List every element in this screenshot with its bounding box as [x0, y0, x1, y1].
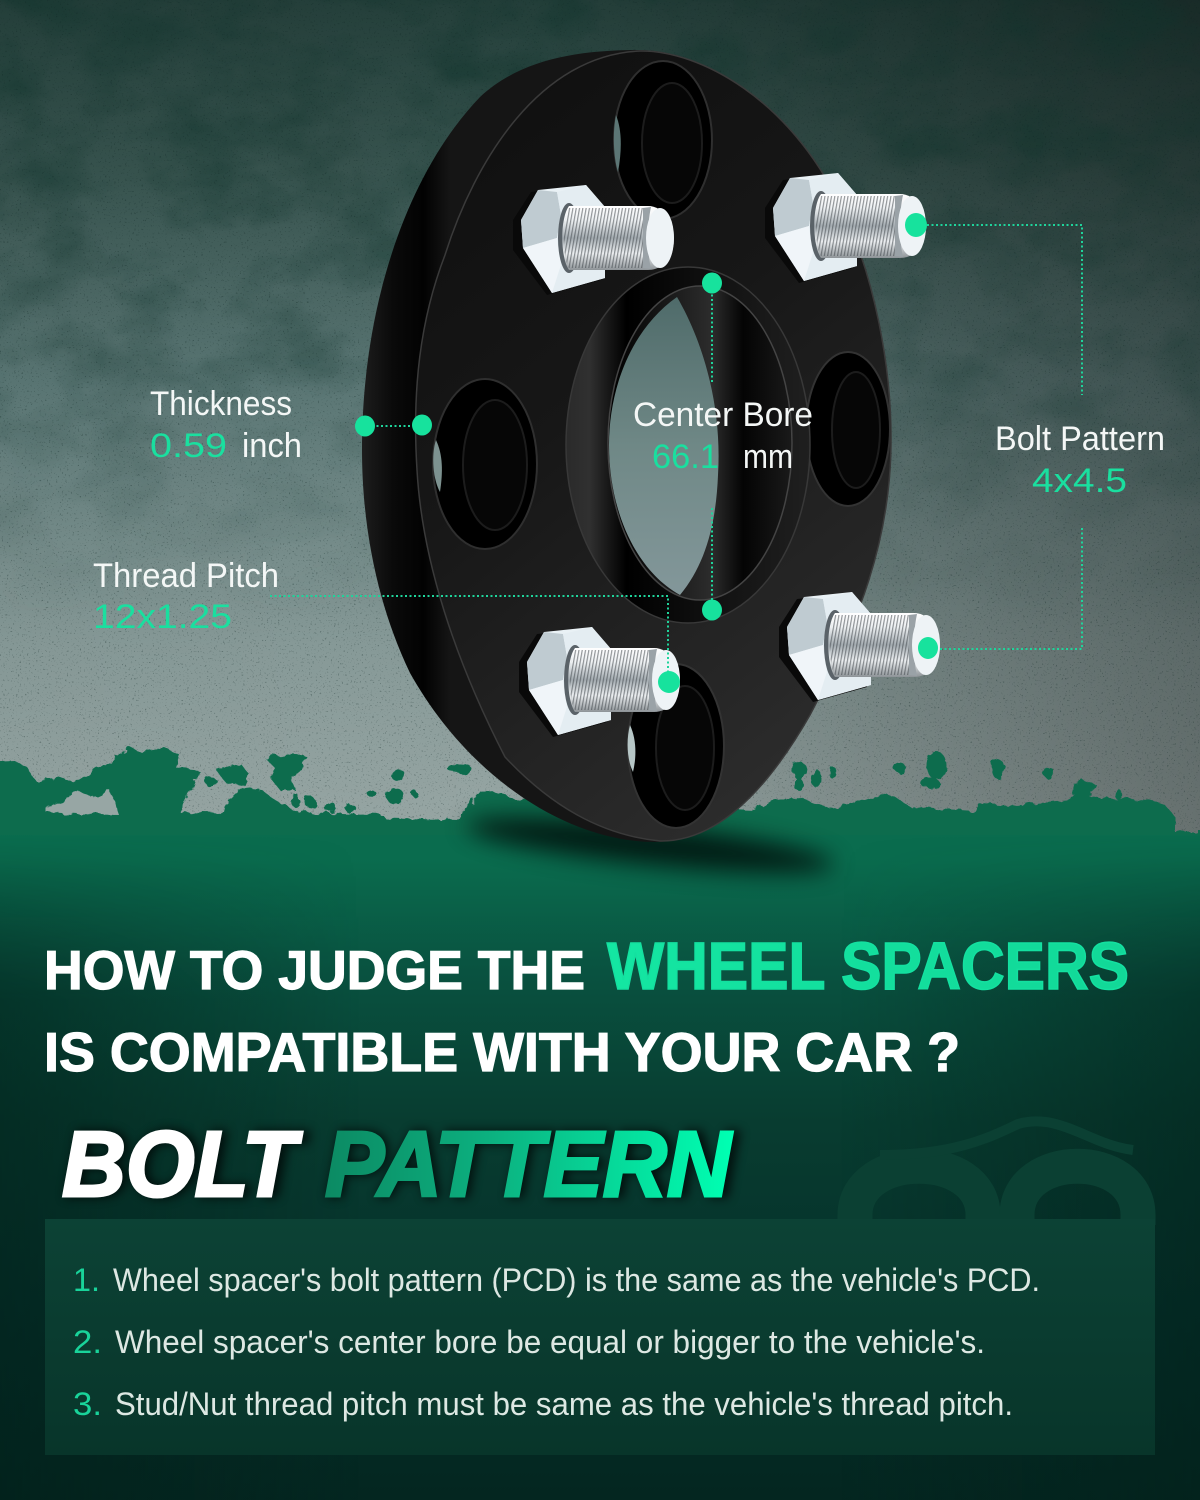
bolt hole: top [614, 61, 712, 219]
splatter blobs [205, 751, 1122, 813]
heading: bolt pattern: BOLT PATTERN [65, 1112, 739, 1216]
label: bolt pattern: Bolt Pattern [995, 420, 1165, 458]
watermark: wheel arches icon [855, 1121, 1138, 1225]
panel: bolt pattern rules [45, 1219, 1155, 1455]
label: center bore [633, 396, 813, 476]
bolt hole: bottom [628, 664, 724, 828]
bolt hole: left [433, 379, 537, 549]
center bore hub [566, 267, 810, 623]
callout: thread pitch leader line [270, 596, 680, 693]
heading: how to judge: WHEEL SPACERS [607, 929, 1129, 1004]
bolt hole: right [806, 352, 890, 506]
label: center bore: 66.1 [652, 438, 719, 476]
callout: bolt pattern leader lines [905, 213, 1082, 659]
stud: top right [765, 173, 926, 283]
background: green paint floor with splatter edge [0, 746, 1200, 1219]
rule 2: 2. [73, 1324, 102, 1360]
heading: how to judge: IS COMPATIBLE WITH YOUR CAR ? [44, 1021, 960, 1083]
see-through bore [609, 297, 719, 595]
label: center bore: Center Bore [633, 396, 813, 434]
wheel spacer shadow on floor [464, 806, 836, 884]
rule 3: Stud/Nut thread pitch must be same as the vehicle's thread pitch. [115, 1386, 1013, 1422]
label: thickness: inch [242, 427, 302, 465]
icon: grey patch in paint [46, 790, 119, 815]
label: thickness: Thickness [150, 385, 292, 423]
spacer front face [416, 51, 891, 841]
callout: thickness leader line [355, 414, 432, 436]
rule 3: 3. [73, 1386, 102, 1422]
stud: bottom right [779, 592, 940, 702]
heading: how to judge: HOW TO JUDGE THE [44, 939, 585, 1001]
label: bolt pattern: 4x4.5 [1032, 462, 1127, 500]
stud: top left [513, 185, 674, 295]
label: thickness: 0.59 [150, 427, 227, 465]
callout: center bore leader lines [702, 272, 722, 620]
label: center bore: mm [743, 438, 793, 476]
stud: bottom left [519, 627, 680, 737]
heading: how to judge [44, 929, 1129, 1083]
label: thread pitch: Thread Pitch [93, 557, 279, 595]
rule 1: Wheel spacer's bolt pattern (PCD) is the same as the vehicle's PCD. [113, 1262, 1040, 1298]
label: bolt pattern [995, 420, 1165, 500]
label: thread pitch [93, 557, 279, 636]
heading: bolt pattern: BOLT [62, 1112, 303, 1216]
label: thread pitch: 12x1.25 [93, 598, 232, 636]
spacer outer rim [362, 50, 891, 842]
rule 2: Wheel spacer's center bore be equal or bigger to the vehicle's. [115, 1324, 985, 1360]
background: grunge grey-green wall [0, 0, 1200, 860]
rule 1: 1. [73, 1262, 100, 1298]
heading: bolt pattern: PATTERN [325, 1112, 733, 1216]
label: thickness [150, 385, 302, 465]
wheel spacer [362, 50, 940, 842]
